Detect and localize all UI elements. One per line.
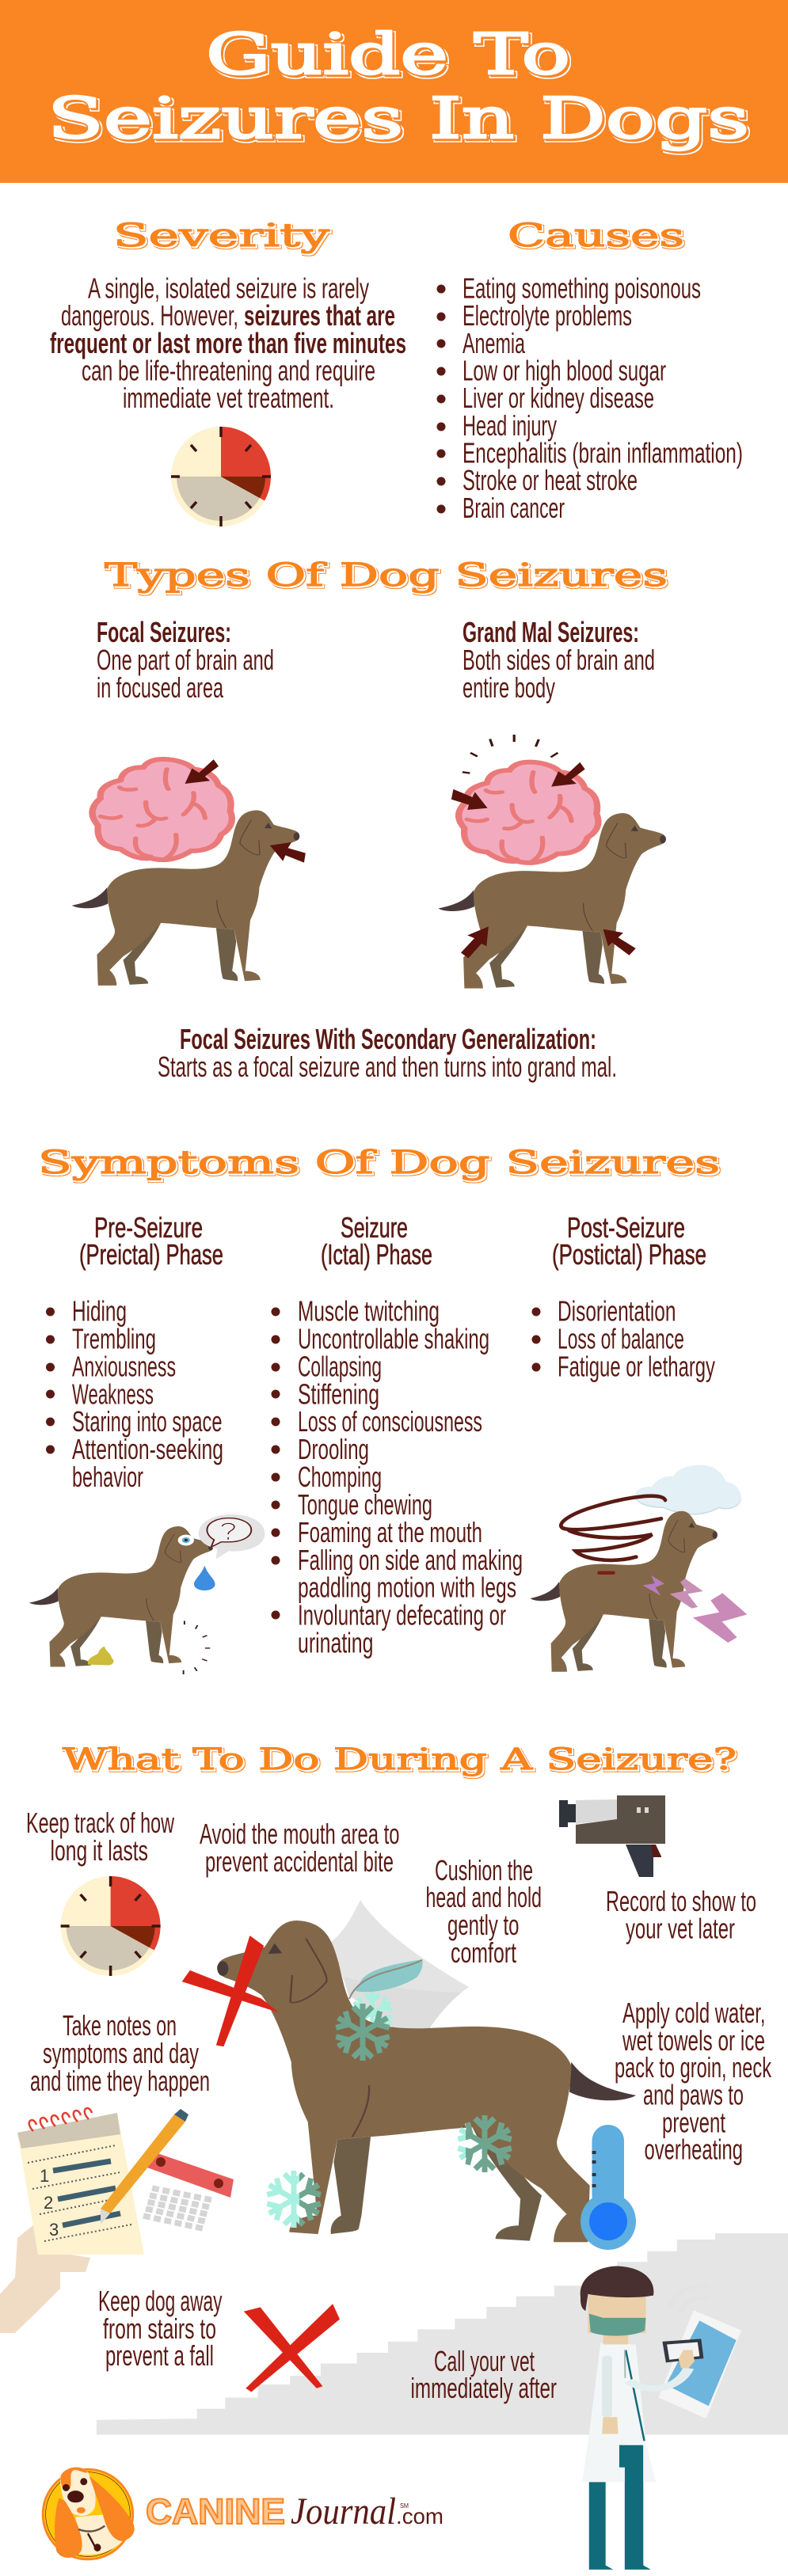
text: avoid mouth: prevent accidental bite — [205, 1845, 394, 1878]
column: post-seizure: Loss of balance — [558, 1322, 684, 1355]
text: keep track: Keep track of how — [26, 1807, 175, 1839]
severity paragraph: dangerous. However, — [61, 299, 238, 332]
severity paragraph: frequent or last more than five minutes — [50, 327, 406, 359]
column: seizure: paddling motion with legs — [298, 1571, 516, 1604]
heading: severity: Severity — [113, 218, 330, 254]
column: seizure: Seizure — [341, 1211, 408, 1244]
focal seizures text: in focused area — [97, 671, 224, 704]
column: post-seizure: Post-Seizure — [567, 1211, 685, 1244]
text: record — [606, 1885, 756, 1944]
icon: notepad with hand and pencil: 2 — [44, 2193, 53, 2213]
text: cushion: Cushion the — [435, 1854, 533, 1886]
illustration: grand mal dog — [438, 735, 666, 988]
column: pre-seizure: Attention-seeking — [72, 1433, 223, 1465]
title line 1: Guide To — [206, 21, 570, 87]
focal seizures text: Focal Seizures: — [97, 616, 231, 648]
grand mal seizures text — [463, 616, 655, 704]
illustration: big dog — [217, 1921, 636, 2242]
illustration: phone and wifi — [658, 2286, 741, 2418]
column: seizure: Loss of consciousness — [298, 1405, 482, 1438]
column: seizure: urinating — [298, 1626, 374, 1658]
column: seizure: Falling on side and making — [298, 1544, 523, 1576]
causes list — [437, 272, 743, 524]
text: cushion: gently to — [447, 1909, 520, 1941]
panel: severity — [50, 218, 406, 526]
grand mal seizures text: Both sides of brain and — [463, 644, 655, 676]
heading: causes: Causes — [508, 218, 684, 254]
causes list: Brain cancer — [463, 492, 565, 524]
column: post-seizure: Disorientation — [558, 1295, 676, 1328]
column: seizure: Uncontrollable shaking — [298, 1322, 489, 1355]
column: pre-seizure: Staring into space — [72, 1405, 222, 1438]
severity paragraph: can be life-threatening and require — [82, 355, 375, 386]
column: seizure: (Ictal) Phase — [321, 1238, 432, 1271]
heading: what to do: What To Do During A Seizure? — [63, 1742, 737, 1776]
illustration: focal seizure dog — [72, 759, 306, 986]
column: seizure: Drooling — [298, 1433, 369, 1465]
panel: symptoms — [29, 1145, 747, 1674]
column: seizure: Foaming at the mouth — [298, 1516, 482, 1548]
column: pre-seizure: Hiding — [72, 1295, 127, 1328]
column: seizure: Tongue chewing — [298, 1488, 432, 1521]
column: pre-seizure: (Preictal) Phase — [79, 1238, 223, 1271]
text: keep dog away — [98, 2285, 222, 2372]
logo service mark: SM — [400, 2502, 409, 2510]
severity paragraph: seizures that are — [244, 299, 395, 332]
text: cushion: head and hold — [426, 1881, 542, 1913]
text: avoid mouth — [200, 1818, 399, 1878]
text: keep dog away: Keep dog away — [98, 2285, 222, 2317]
column: seizure: Stiffening — [298, 1377, 379, 1410]
causes list: Anemia — [463, 327, 526, 359]
icon: snowflake paw — [265, 2171, 323, 2228]
grand mal seizures text: Grand Mal Seizures: — [463, 616, 639, 648]
logo script: Journal — [291, 2491, 396, 2532]
column: seizure: Muscle twitching — [298, 1295, 440, 1328]
logo: canine journal — [43, 2468, 443, 2559]
icon: calendar — [143, 2150, 234, 2228]
text: apply cold water — [615, 1997, 772, 2166]
text: take notes: and time they happen — [30, 2065, 210, 2097]
causes list: Low or high blood sugar — [463, 355, 666, 386]
text: cushion: comfort — [451, 1936, 516, 1969]
text: call your vet: immediately after — [410, 2372, 557, 2404]
header banner — [0, 0, 788, 183]
panel: what to do during a seizure — [0, 1742, 788, 2570]
text: keep dog away: prevent a fall — [105, 2339, 214, 2372]
text: take notes: Take notes on — [63, 2009, 177, 2042]
icon: red x on mouth — [182, 1936, 280, 2046]
causes list: Stroke or heat stroke — [463, 464, 638, 496]
heading: symptoms: Symptoms Of Dog Seizures — [38, 1145, 720, 1181]
icon: thermometer — [581, 2125, 636, 2250]
secondary generalization text — [158, 1023, 617, 1083]
illustration: pre-seizure dog — [29, 1514, 265, 1674]
causes list: Head injury — [463, 409, 557, 442]
column: pre-seizure: Trembling — [72, 1322, 156, 1355]
illustration: post-seizure dog — [531, 1465, 747, 1672]
column: pre-seizure: Pre-Seizure — [94, 1211, 203, 1244]
focal seizures text — [97, 616, 274, 704]
severity paragraph: A single, isolated seizure is rarely — [88, 272, 369, 304]
icon: snowflake groin — [455, 2115, 514, 2172]
column: seizure: Involuntary defecating or — [298, 1599, 506, 1631]
column: post-seizure — [532, 1211, 715, 1382]
text: avoid mouth: Avoid the mouth area to — [200, 1818, 399, 1850]
illustration: vet — [581, 2266, 703, 2570]
icon: clock 2 — [61, 1876, 161, 1976]
icon: pillow and feather — [331, 1900, 469, 2031]
panel: types of dog seizures — [72, 557, 668, 1083]
logo domain: .com — [396, 2504, 443, 2529]
icon: notepad with hand and pencil — [0, 2108, 188, 2333]
column: seizure: Collapsing — [298, 1350, 382, 1382]
severity paragraph — [50, 272, 406, 414]
column: post-seizure: (Postictal) Phase — [552, 1238, 706, 1271]
text: apply cold water: prevent — [662, 2106, 725, 2139]
text: keep track: long it lasts — [51, 1834, 148, 1867]
icon: clock — [171, 427, 271, 526]
column: pre-seizure — [46, 1211, 223, 1493]
icon: notepad with hand and pencil: 1 — [40, 2166, 49, 2186]
text: keep track — [26, 1807, 175, 1867]
icon: snowflake neck — [333, 2004, 392, 2061]
column: pre-seizure: behavior — [72, 1461, 143, 1493]
logo wordmark: CANINE — [146, 2491, 285, 2532]
icon: red x — [244, 2304, 340, 2392]
column: pre-seizure: Weakness — [72, 1377, 154, 1410]
panel: causes — [437, 218, 743, 524]
causes list: Electrolyte problems — [463, 299, 632, 332]
causes list: Liver or kidney disease — [463, 382, 654, 414]
text: take notes: symptoms and day — [43, 2037, 199, 2069]
text: record: your vet later — [626, 1913, 735, 1944]
icon: mint snowflake behind — [350, 1992, 394, 2035]
column: pre-seizure: Anxiousness — [72, 1350, 176, 1382]
text: take notes — [30, 2009, 210, 2097]
grand mal seizures text: entire body — [463, 671, 555, 704]
focal seizures text: One part of brain and — [97, 644, 274, 676]
text: cushion — [426, 1854, 542, 1969]
column: seizure — [271, 1211, 523, 1658]
logo dog head — [43, 2468, 135, 2559]
text: call your vet — [410, 2345, 557, 2404]
text: call your vet: Call your vet — [434, 2345, 535, 2377]
column: seizure: Chomping — [298, 1461, 382, 1493]
staircase background — [97, 2233, 788, 2435]
icon: video camera — [559, 1795, 665, 1877]
heading: types: Types Of Dog Seizures — [105, 557, 668, 594]
severity paragraph: immediate vet treatment. — [123, 382, 334, 414]
text: keep dog away: from stairs to — [103, 2312, 216, 2345]
title line 2: Seizures In Dogs — [48, 85, 749, 151]
icon: notepad with hand and pencil: 3 — [49, 2220, 59, 2240]
